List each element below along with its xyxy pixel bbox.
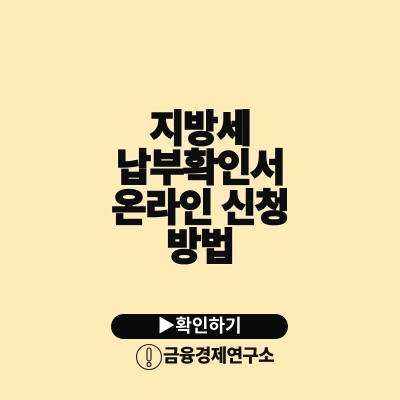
title line 2: 납부확인서 (116, 148, 284, 190)
button: confirm: ▶확인하기 (157, 316, 242, 336)
button: confirm (111, 314, 288, 339)
brand name: 금융경제연구소 (163, 346, 274, 366)
title line 3: 온라인 신청 (112, 188, 288, 230)
title (111, 108, 288, 269)
icon: exclamation circle (136, 344, 162, 370)
title line 4: 방법 (166, 227, 234, 269)
title line 1: 지방세 (150, 109, 250, 151)
